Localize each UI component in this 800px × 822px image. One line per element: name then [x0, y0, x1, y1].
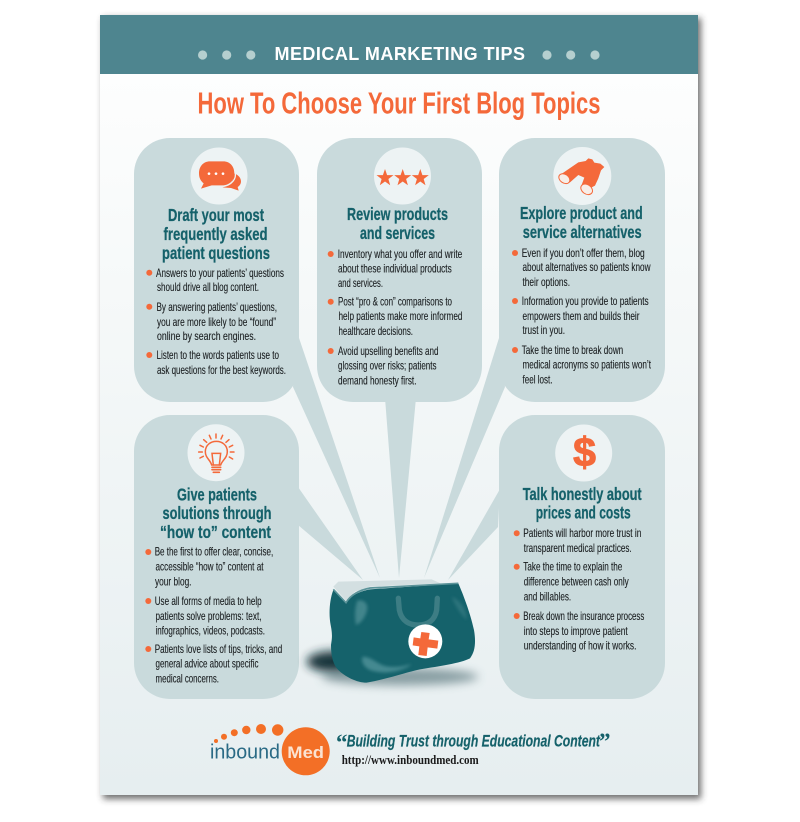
- bullet list: transparent medical practices.: [524, 541, 632, 555]
- bullet list: you are more likely to be “found”: [157, 315, 276, 329]
- heading: Draft your most: [168, 205, 264, 225]
- heading: Review products: [347, 204, 448, 224]
- panel: prices and costs: [499, 415, 665, 699]
- bullet list: Post “pro & con” comparisons to: [338, 295, 452, 309]
- bullet list: Patients love lists of tips, tricks, and: [155, 642, 282, 656]
- bullet list: demand honesty first.: [338, 373, 416, 387]
- tagline: Building Trust through Educational Content: [347, 732, 601, 751]
- website url: http://www.inboundmed.com: [342, 753, 479, 767]
- panel: how to content: [134, 415, 299, 699]
- bullet list: healthcare decisions.: [338, 324, 413, 338]
- heading: service alternatives: [523, 222, 642, 242]
- bullet list: accessible “how to” content at: [156, 560, 264, 574]
- bullet list: medical concerns.: [156, 672, 219, 686]
- logo: inboundMed: Med: [287, 743, 324, 762]
- bullet list: about alternatives so patients know: [522, 260, 651, 274]
- bullet list: [146, 266, 286, 377]
- bullet list: [512, 246, 651, 386]
- bullet list: [145, 545, 282, 686]
- bullet list: medical acronyms so patients won’t: [522, 357, 651, 371]
- bullet list: Information you provide to patients: [522, 294, 649, 308]
- bullet list: Use all forms of media to help: [155, 594, 262, 608]
- icon: binoculars: [557, 158, 604, 197]
- bullet list: Inventory what you offer and write: [338, 247, 463, 261]
- heading: [523, 484, 642, 523]
- bullet list: feel lost.: [522, 372, 552, 386]
- bullet list: Take the time to explain the: [523, 560, 623, 574]
- tagline: [336, 729, 610, 755]
- heading: and services: [360, 223, 435, 243]
- bullet list: Take the time to break down: [522, 343, 623, 357]
- bullet list: Patients will harbor more trust in: [523, 526, 641, 540]
- heading: frequently asked: [164, 224, 268, 244]
- heading: [160, 485, 272, 542]
- bullet list: ask questions for the best keywords.: [157, 363, 286, 377]
- heading: Explore product and: [520, 203, 643, 223]
- icon: speech bubbles: [199, 161, 241, 191]
- bullet list: Be the first to offer clear, concise,: [155, 545, 273, 559]
- icon: light bulb: [199, 434, 234, 472]
- illustration: doctor's bag: [307, 579, 478, 685]
- bullet list: Listen to the words patients use to: [156, 348, 279, 362]
- panel: explore alternatives: [499, 138, 665, 402]
- bullet list: infographics, videos, podcasts.: [156, 624, 265, 638]
- bullet list: Avoid upselling benefits and: [338, 344, 438, 358]
- bullet list: into steps to improve patient: [524, 624, 628, 638]
- bullet list: glossing over risks; patients: [338, 359, 437, 373]
- bullet list: [328, 247, 463, 387]
- page sheet with drop shadow: [100, 15, 701, 799]
- tagline: “: [336, 730, 348, 755]
- bullet list: empowers them and builds their: [522, 309, 640, 323]
- bullet list: help patients make more informed: [338, 309, 462, 323]
- logo: inboundMed: [210, 724, 330, 775]
- bullet list: and services.: [338, 276, 383, 290]
- icon: three stars: [376, 169, 429, 185]
- bullet list: and billables.: [524, 589, 571, 603]
- bullet list: Answers to your patients’ questions: [156, 266, 284, 280]
- heading: Talk honestly about: [523, 484, 642, 504]
- bullet list: should drive all blog content.: [157, 280, 259, 294]
- title: How To Choose Your First Blog Topics: [198, 86, 600, 120]
- heading: [520, 203, 643, 242]
- bullet list: general advice about specific: [156, 657, 259, 671]
- heading: “how to” content: [160, 522, 271, 542]
- icon: dollar sign: $: [573, 429, 596, 475]
- heading: Give patients: [177, 485, 257, 505]
- heading: [162, 205, 270, 263]
- panel: frequently asked questions: [134, 138, 299, 402]
- bullet list: your blog.: [155, 575, 192, 589]
- bullet list: online by search engines.: [157, 329, 256, 343]
- logo: inboundMed: inbound: [210, 742, 280, 764]
- bullet list: Break down the insurance process: [523, 609, 644, 623]
- bullet list: Even if you don’t offer them, blog: [522, 246, 645, 260]
- heading: solutions through: [162, 503, 272, 523]
- header band: MEDICAL MARKETING TIPS: [274, 44, 525, 64]
- tagline: ”: [599, 729, 610, 754]
- bullet list: patients solve problems: text,: [156, 609, 262, 623]
- bullet list: [514, 526, 644, 652]
- bullet list: about these individual products: [338, 262, 452, 276]
- heading: patient questions: [162, 243, 270, 263]
- bullet list: By answering patients’ questions,: [156, 300, 277, 314]
- bullet list: their options.: [522, 275, 570, 289]
- bullet list: trust in you.: [522, 323, 565, 337]
- bullet list: difference between cash only: [524, 575, 629, 589]
- bullet list: understanding of how it works.: [524, 638, 636, 652]
- heading: [347, 204, 448, 243]
- heading: prices and costs: [536, 503, 631, 523]
- speech bubble tails rising from the bag: [293, 335, 505, 580]
- header band: [100, 15, 698, 74]
- panel: review products: [317, 138, 482, 402]
